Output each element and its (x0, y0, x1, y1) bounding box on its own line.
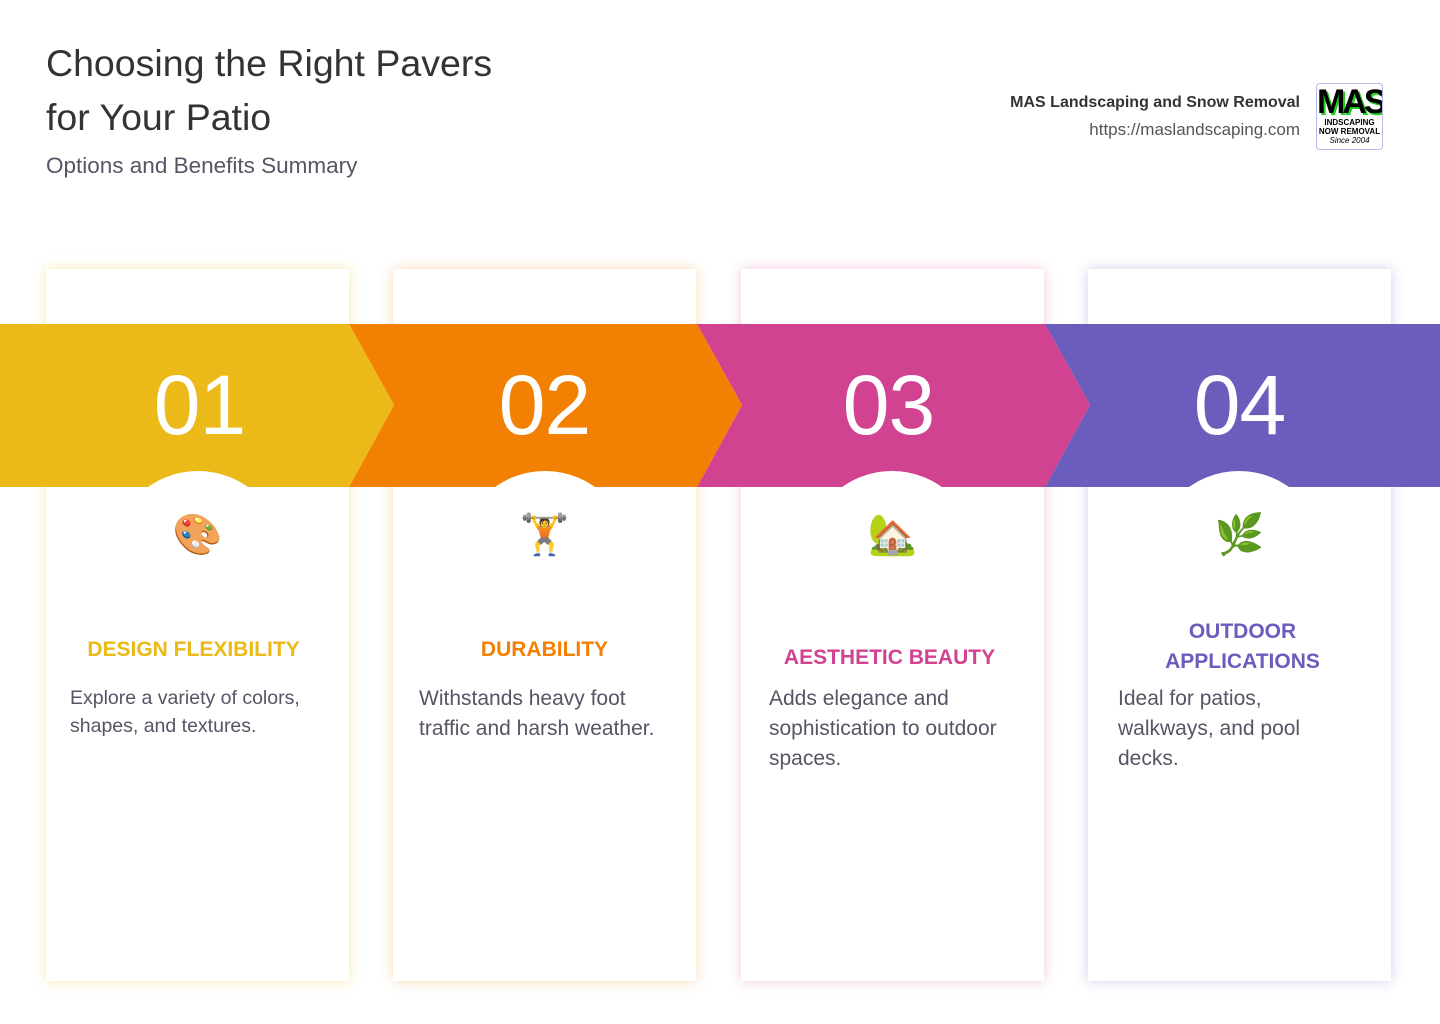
brand text (1010, 94, 1300, 139)
title: Choosing the Right Pavers (46, 42, 492, 84)
text 3: Adds elegance and sophistication to outdoor spaces. (769, 687, 997, 770)
heading 1: DESIGN FLEXIBILITY (87, 638, 300, 661)
icon: weightlifter: 🏋️ (520, 511, 569, 558)
logo: INDSCAPING (1324, 118, 1375, 127)
text 2: Withstands heavy foot traffic and harsh weather. (419, 687, 654, 740)
heading 3: AESTHETIC BEAUTY (784, 646, 995, 669)
panel: card 3 (741, 269, 1044, 981)
heading 4 (1165, 620, 1320, 673)
logo: NOW REMOVAL (1319, 127, 1380, 136)
number 04: 04 (1194, 358, 1285, 452)
number 03: 03 (843, 358, 934, 452)
heading 4: OUTDOOR (1189, 620, 1296, 643)
number 02: 02 (499, 358, 590, 452)
heading 4: APPLICATIONS (1165, 650, 1320, 673)
text 1: Explore a variety of colors, shapes, and textures. (70, 687, 300, 737)
text 4: Ideal for patios, walkways, and pool decks. (1118, 687, 1300, 770)
icon: house: 🏡 (868, 511, 917, 558)
brand text: MAS Landscaping and Snow Removal (1010, 94, 1300, 111)
logo: Since 2004 (1329, 136, 1370, 145)
logo (1316, 83, 1383, 150)
panel: card 4 (1088, 269, 1391, 981)
icon: herb: 🌿 (1215, 511, 1264, 558)
title: for Your Patio (46, 96, 271, 138)
brand text: https://maslandscaping.com (1089, 120, 1300, 139)
logo: MAS (1317, 83, 1383, 121)
heading 2: DURABILITY (481, 638, 608, 661)
title (46, 42, 492, 138)
panel: card 2 (393, 269, 696, 981)
panel: card 1 (46, 269, 349, 981)
subtitle: Options and Benefits Summary (46, 153, 357, 178)
number 01: 01 (154, 358, 245, 452)
icon: palette: 🎨 (173, 511, 222, 558)
